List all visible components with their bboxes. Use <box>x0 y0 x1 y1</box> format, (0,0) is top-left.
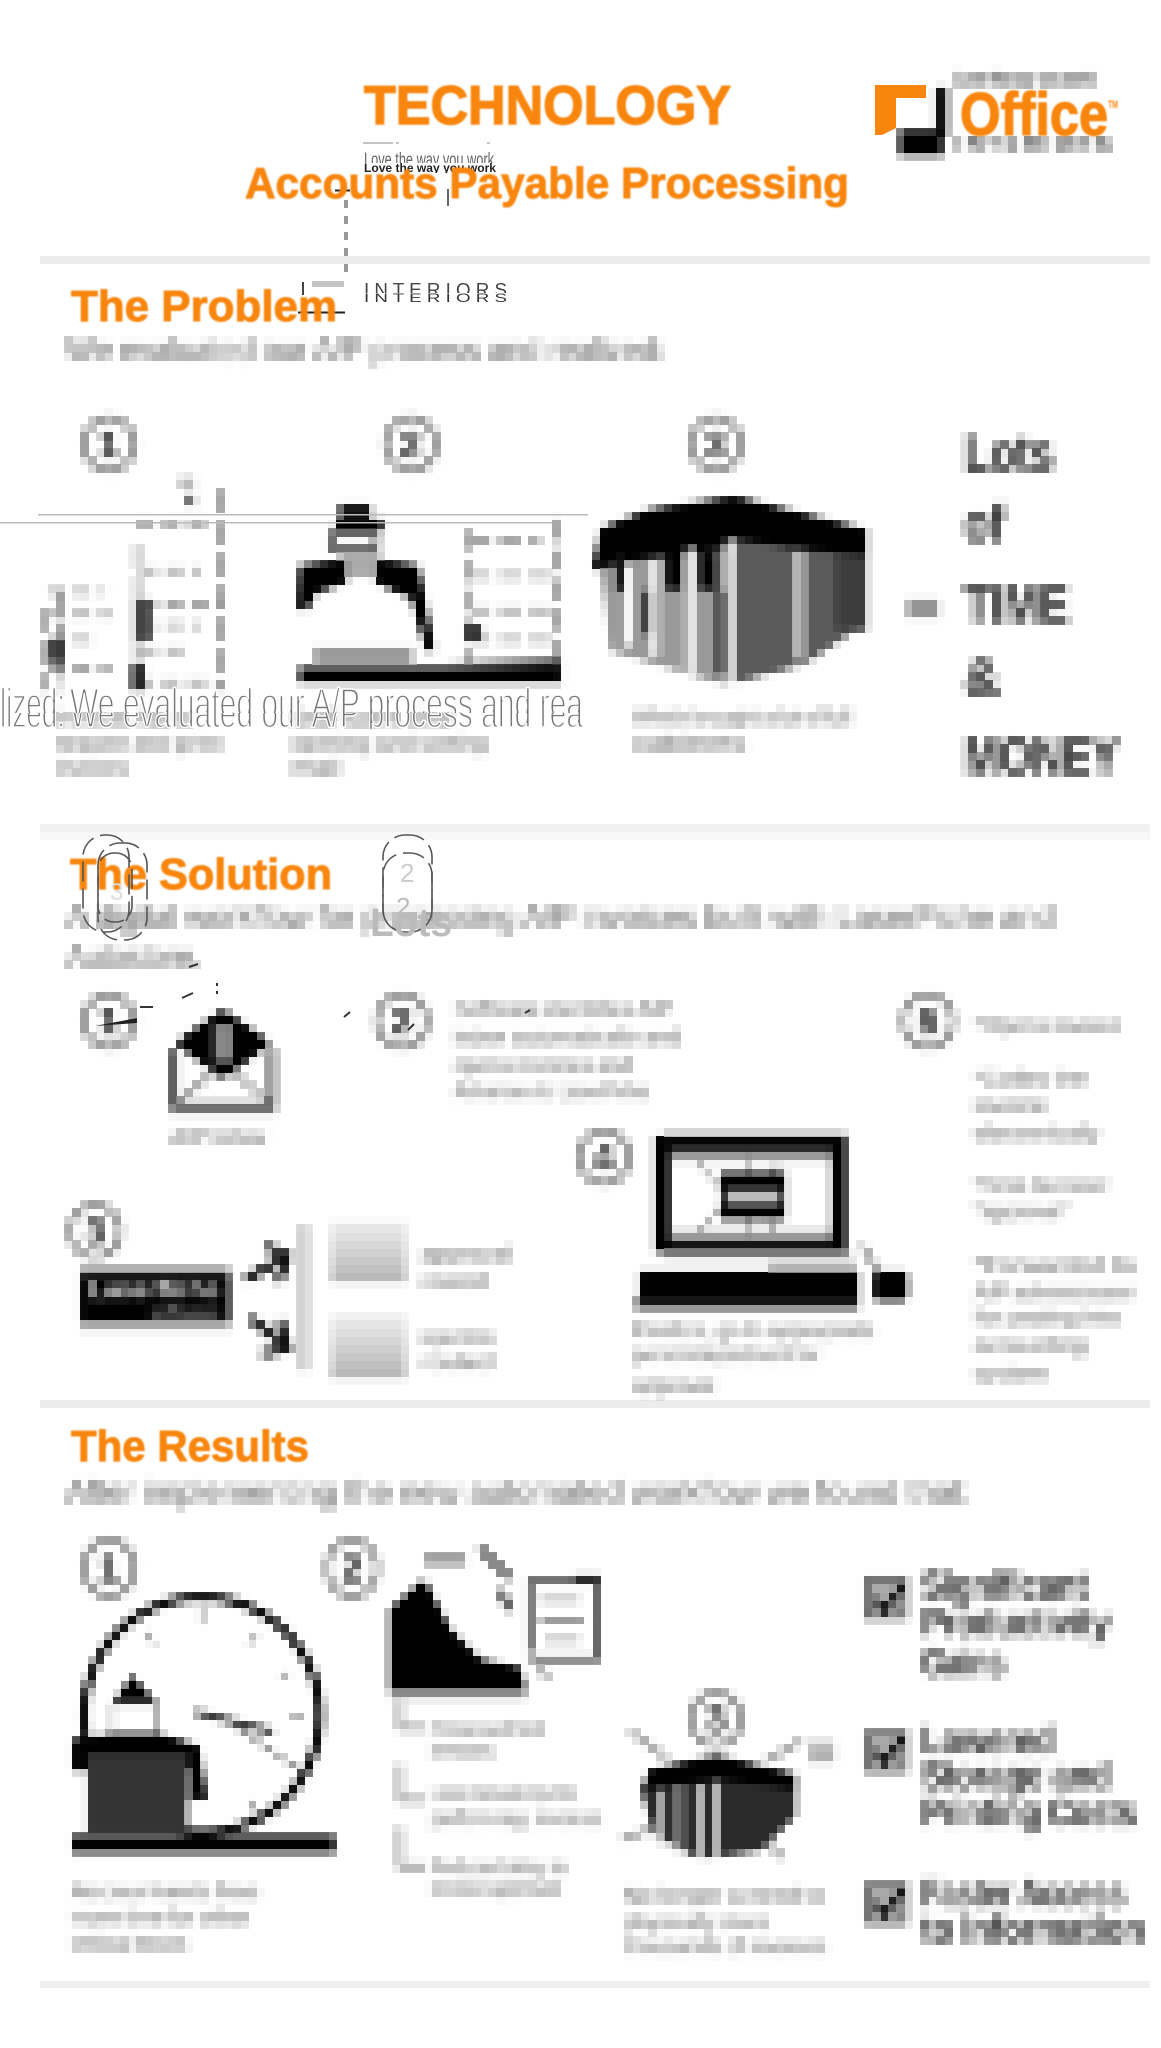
overlay: doubled evaluation sentence: lized: <box>0 691 65 736</box>
caption: result 1: critical tasks <box>71 1933 187 1955</box>
logo wordmark: TM <box>1108 99 1118 111</box>
overlay: dashed number ghosts: Lots <box>370 901 452 945</box>
overlay: doubled evaluation sentence: We evaluated our A/P process and rea <box>70 681 583 726</box>
list: workflow gains: Processed fast <box>431 1719 544 1741</box>
results content mosaic <box>66 1474 1144 1958</box>
number 1 <box>84 995 134 1047</box>
overlay: dashed number ghosts: 3 <box>110 879 123 906</box>
title: technology: TECHNOLOGY <box>364 74 731 136</box>
main titles <box>245 74 849 208</box>
step 5 bullet list: for posting into <box>974 1307 1119 1329</box>
label: rejection routed: rejection <box>421 1327 493 1349</box>
caption 1: invoices <box>57 757 127 779</box>
step 5 bullet list: invoice <box>974 1095 1046 1117</box>
overlay: tagline and dashed logo frame <box>298 143 507 312</box>
caption 3: Which brought a lot of full <box>634 707 851 729</box>
caption: A/P inbox: A/P Inbox <box>171 1127 266 1149</box>
heading: the solution: The Solution <box>70 850 332 899</box>
step 5 bullet list: *Forwarded to <box>974 1255 1134 1277</box>
list: workflow gains: Less manual input to <box>431 1783 575 1805</box>
step 4 caption: approval <box>634 1375 714 1397</box>
callout: lots of time and money <box>964 425 1119 786</box>
number 1: 1 <box>99 424 119 465</box>
arrow: rejection <box>250 1318 288 1354</box>
number 1 <box>84 1540 134 1596</box>
caption 1: Invoices had to <box>57 708 193 730</box>
step 4 caption: person/department for <box>634 1344 819 1366</box>
results intro text: After implementing the new automated workflow we found that: <box>66 1474 971 1509</box>
number 2 <box>327 1540 377 1596</box>
step 5 bullet list: accounting <box>974 1335 1086 1357</box>
overlay: dashed number ghosts <box>83 835 530 1030</box>
number 3 <box>70 1205 120 1257</box>
caption: result 3: physically store <box>624 1912 769 1934</box>
caption 2: opening and sorting <box>292 733 486 755</box>
number 5: 5 <box>918 1001 938 1042</box>
step 2 text: inbox automatically and <box>454 1027 680 1049</box>
list: workflow gains: invoices <box>431 1740 493 1762</box>
caption 1: require and print <box>57 733 221 755</box>
callout: lots of time and money: Lots <box>964 425 1054 483</box>
benefit: lowered costs <box>868 1720 1136 1834</box>
folder: approved <box>332 1222 405 1282</box>
number 1: 1 <box>99 1548 119 1589</box>
caption 3: cabinets <box>634 733 746 755</box>
number 5 <box>903 995 953 1047</box>
logo mosaic: I N T E R I O R S <box>956 134 1110 154</box>
subtitle: accounts payable processing: Accounts Payable Processing <box>245 159 849 208</box>
panel: the results <box>66 1422 1144 1958</box>
caption 2 <box>292 708 486 779</box>
panel: the solution <box>67 835 1134 1397</box>
number 2: 2 <box>401 424 421 465</box>
LaserFiche box: software <box>150 1305 220 1322</box>
icon: filing cabinets room <box>593 497 866 684</box>
caption 3 <box>634 707 851 755</box>
folder: rejected <box>332 1316 405 1378</box>
routing divider <box>300 1226 308 1370</box>
benefit: productivity gains: Gains <box>922 1642 1005 1684</box>
icon: computer with approval <box>636 1130 907 1308</box>
number 4: 4 <box>594 1137 614 1178</box>
caption 1 <box>57 708 221 779</box>
step 5 bullet list: system <box>974 1363 1046 1385</box>
step 5 bullet list <box>974 1015 1134 1385</box>
number 4 <box>579 1131 629 1183</box>
caption: result 1 <box>71 1881 259 1955</box>
caption 2: mail <box>292 757 340 779</box>
overlay: stray horizontal rules <box>0 514 588 524</box>
benefit: lowered costs: Lowered <box>922 1720 1054 1762</box>
callout: lots of time and money: & <box>964 649 1000 707</box>
overlay: doubled evaluation sentence: lized: <box>0 681 65 726</box>
number 3 <box>691 1693 741 1745</box>
label: approval routed: routed <box>421 1271 486 1293</box>
LaserFiche box: Laserfiche <box>90 1276 220 1304</box>
solution intro text: A digital workflow for processing A/P invoices built with LaserFiche and <box>67 899 1054 934</box>
icon: person opening mail <box>298 505 560 682</box>
benefit: faster access <box>868 1873 1144 1951</box>
caption: result 1: Accountants has <box>71 1881 259 1903</box>
benefit: productivity gains <box>868 1565 1110 1684</box>
label: approval routed: approval <box>421 1244 510 1266</box>
equals sign <box>810 1742 834 1762</box>
company logo <box>875 69 1118 155</box>
icon: reduced cabinets <box>622 1731 802 1858</box>
callout: lots of time and money: of <box>964 495 1005 553</box>
solution intro text: Autostore. <box>67 939 201 974</box>
step 5 bullet list: *Opens invoice <box>974 1015 1121 1037</box>
label: approval routed <box>421 1244 510 1293</box>
step 5 bullet list: "approve" <box>974 1201 1068 1223</box>
solution intro text <box>67 899 1054 974</box>
step 4 caption: Finalize, go to appropriate <box>634 1320 874 1342</box>
caption: result 3 <box>624 1885 826 1958</box>
panel: the problem <box>0 282 1119 786</box>
caption: result 1: more time for other <box>71 1907 249 1929</box>
icon: paper flowing to document <box>390 1548 599 1698</box>
logo mosaic <box>900 69 1110 155</box>
list: workflow gains: invoice approval <box>431 1878 559 1900</box>
list: workflow gains: Reduced delay in <box>431 1857 566 1879</box>
step 5 bullet list: *Final decision: <box>974 1175 1109 1197</box>
number 3 <box>691 418 741 470</box>
icon: clock with person at laptop <box>73 1598 334 1852</box>
list: workflow gains <box>400 1700 601 1900</box>
overlay: tagline and dashed logo frame: I N T E R I O R S <box>364 280 507 300</box>
overlay: dashed number ghosts: 2 <box>396 892 410 922</box>
overlay: tagline and dashed logo frame: Love the way you work <box>364 161 496 175</box>
step 2 text <box>454 999 680 1103</box>
LaserFiche box <box>81 1266 229 1330</box>
benefit: lowered costs: Storage and <box>922 1755 1110 1797</box>
step 5 bullet list: A/P administrator <box>974 1282 1134 1304</box>
label: rejection routed <box>421 1327 493 1374</box>
problem content mosaic <box>46 332 1119 786</box>
caption 2: Staff spent time <box>292 708 452 730</box>
callout: lots of time and money: MONEY <box>964 728 1119 786</box>
step 4 caption <box>634 1320 874 1397</box>
number 1 <box>84 418 134 470</box>
step 5 bullet list: *Codes the <box>974 1068 1086 1090</box>
logo wordmark: Office <box>960 81 1108 148</box>
equals sign <box>908 600 938 617</box>
panel: header <box>245 69 1118 312</box>
step 2 text: opens invoices and <box>454 1055 632 1077</box>
list: workflow gains: perform reg. invoices <box>431 1808 601 1830</box>
label: rejection routed: routed <box>421 1352 493 1374</box>
number 1: 1 <box>99 1001 119 1042</box>
solution content mosaic <box>67 899 1134 1397</box>
benefit: productivity gains: Significant <box>922 1565 1087 1607</box>
icon: paper stacks <box>46 478 222 690</box>
number 3: 3 <box>706 424 726 465</box>
step 2 text: Advances to LaserFiche <box>454 1081 648 1103</box>
overlay: doubled evaluation sentence: We evaluated our A/P process and rea <box>70 691 583 736</box>
icon: envelope with document <box>171 1010 275 1114</box>
caption: result 3: thousands of invoices <box>624 1936 826 1958</box>
step 2 text: Software identifies A/P <box>454 999 672 1021</box>
overlay: dashed number ghosts: 2 <box>400 858 414 888</box>
logo mosaic: Love the way you work <box>956 69 1095 89</box>
benefit: productivity gains: Productivity <box>922 1602 1110 1644</box>
number 2 <box>377 995 427 1047</box>
number 2: 2 <box>392 1001 412 1042</box>
caption: result 3: No longer a need to <box>624 1885 824 1907</box>
logo mark <box>875 85 926 135</box>
number 2: 2 <box>342 1548 362 1589</box>
problem intro text: We evaluated our A/P process and realized: <box>66 332 665 367</box>
number 3: 3 <box>85 1211 105 1252</box>
overlay: tagline and dashed logo frame: I N T E R I O R S <box>364 291 507 305</box>
step 5 bullet list: electronically <box>974 1123 1099 1145</box>
arrow: approval <box>246 1246 288 1282</box>
heading: the results: The Results <box>71 1422 309 1471</box>
heading: the problem: The Problem <box>71 282 337 331</box>
overlay: tagline and dashed logo frame: Love the way you work <box>364 150 494 171</box>
number 2 <box>386 418 436 470</box>
number 3: 3 <box>706 1699 726 1740</box>
callout: lots of time and money: TIME <box>964 576 1069 634</box>
